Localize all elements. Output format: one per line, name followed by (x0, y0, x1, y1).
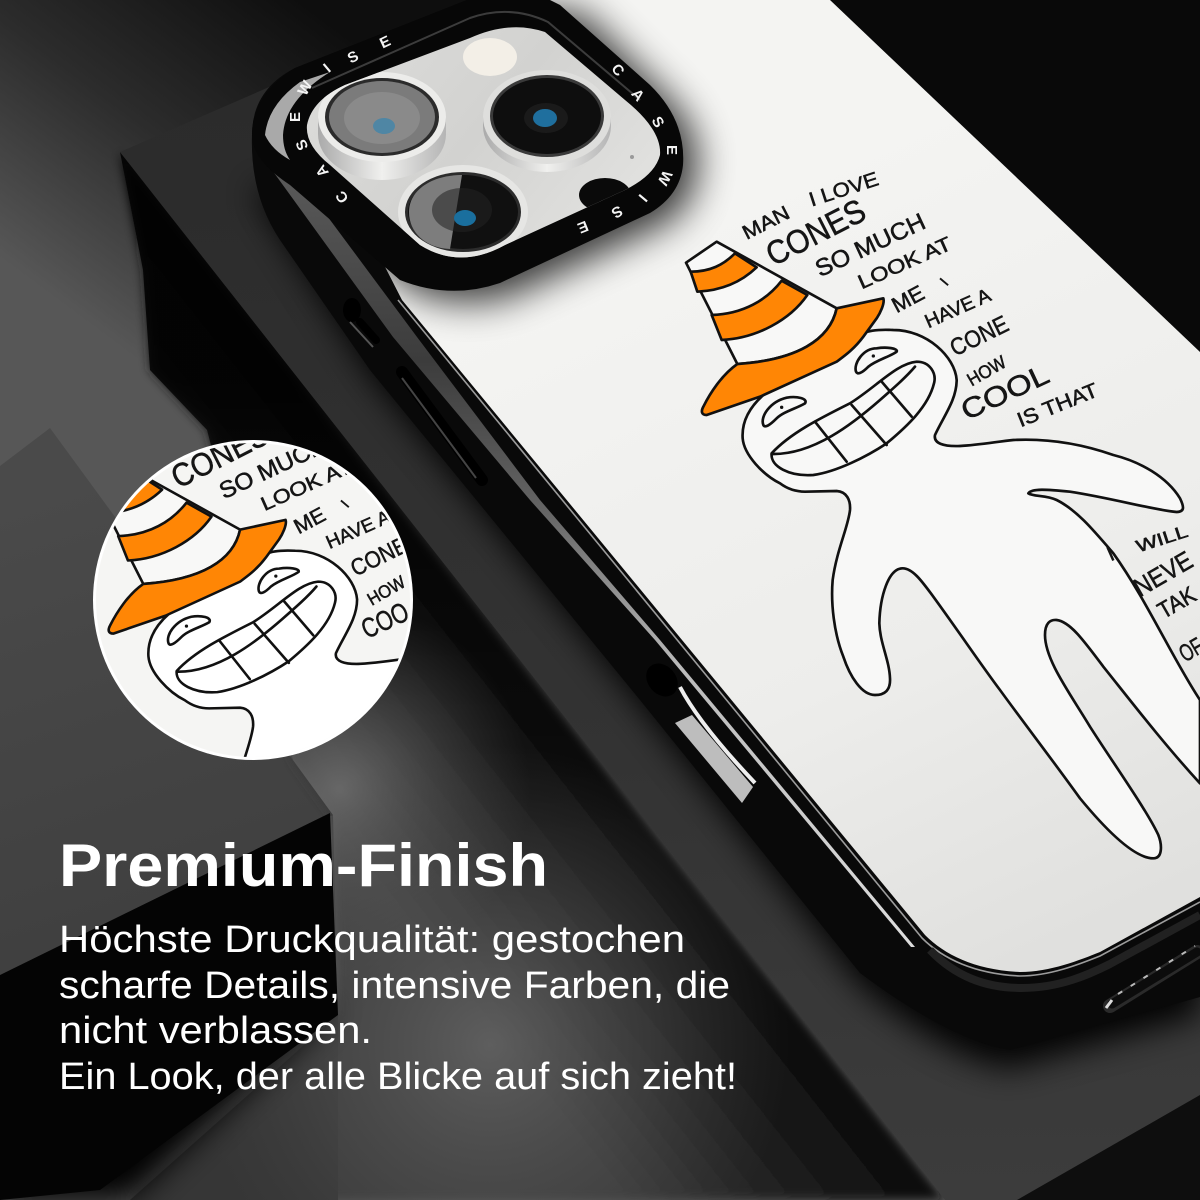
handwritten text: HOW (963, 351, 1010, 390)
artwork: cone character (686, 168, 1200, 858)
magnified eyes (168, 568, 299, 645)
ring lettering: S (648, 114, 667, 131)
ring lettering: A (628, 86, 648, 105)
ring lettering: S (293, 137, 312, 153)
mouth (772, 362, 935, 475)
ring lettering: I (635, 191, 650, 205)
glossy edge highlights (272, 170, 1200, 988)
ring lettering: E (287, 112, 304, 122)
body text (59, 919, 737, 1098)
ring lettering: E (663, 145, 680, 155)
magnified cone (107, 480, 288, 635)
magnified handwriting: COO (356, 596, 414, 645)
handwritten text: CONE (946, 311, 1013, 362)
magnified handwriting: ME (290, 503, 330, 539)
phone case (252, 0, 1200, 1050)
handwritten text: SO MUCH (811, 208, 930, 283)
lens: main (483, 70, 611, 172)
magnified handwriting: I (338, 498, 353, 511)
ring lettering: W (653, 168, 675, 189)
magnified handwriting (172, 443, 408, 637)
handwritten text: ME (887, 280, 928, 318)
ring lettering: A (312, 161, 332, 180)
handwritten text: MAN (739, 202, 793, 244)
figure outline (743, 330, 1200, 858)
handwritten text: LOOK AT (855, 233, 955, 294)
ring reflection (312, 12, 640, 100)
ring lettering: C (608, 61, 628, 80)
ring lettering: S (345, 48, 362, 67)
handwritten text: I LOVE (806, 168, 881, 211)
ring lettering: C (332, 187, 352, 206)
ring lettering: I (320, 61, 334, 76)
ring lettering: W (295, 77, 317, 99)
lens: ultra wide (318, 72, 446, 180)
magnified handwriting: HOW (364, 572, 409, 609)
flash (463, 38, 517, 76)
handwritten text: WILL (1133, 521, 1191, 556)
clear rim highlight (265, 72, 330, 160)
side volume button (402, 372, 482, 480)
eyes (763, 348, 897, 426)
island shadow on back (386, 0, 726, 331)
camera island (252, 0, 683, 291)
white back panel (300, 0, 1200, 972)
handwritten text: HAVE A (922, 285, 994, 333)
microphone hole (579, 178, 629, 208)
magnified handwriting: HAVE A (323, 506, 394, 553)
handwritten text (739, 168, 1200, 668)
body text: nicht verblassen. (59, 1010, 372, 1052)
ring lettering: E (575, 217, 591, 236)
lens: telephoto (398, 165, 528, 259)
title: Premium-Finish (59, 832, 548, 899)
phone shadow (253, 180, 1200, 1068)
magnified mouth (177, 582, 336, 692)
detail magnifier circle (93, 440, 413, 760)
magnified figure (147, 549, 399, 757)
handwritten text: COOL (956, 359, 1054, 427)
side button hole (343, 298, 376, 347)
magnified handwriting: LOOK AT (258, 456, 356, 516)
handwritten text: CONES (760, 192, 872, 274)
magnified handwriting: CONE (346, 532, 412, 581)
magnified handwriting: SO MUCH (215, 432, 331, 504)
body text: Höchste Druckqualität: gestochen (59, 919, 685, 961)
body text: scharfe Details, intensive Farben, die (59, 965, 730, 1007)
handwritten text: IS THAT (1014, 379, 1102, 432)
magnified handwriting: CONES (165, 416, 274, 495)
chrome side button (640, 657, 755, 803)
charging port (1106, 946, 1197, 1008)
ring lettering: E (377, 33, 393, 52)
body text: Ein Look, der alle Blicke auf sich zieht! (59, 1056, 737, 1098)
handwritten text: I (937, 276, 952, 289)
ring lettering (287, 33, 680, 236)
traffic cone hat (686, 242, 884, 415)
handwritten text: I (1103, 543, 1118, 566)
camera window (307, 27, 660, 258)
ring lettering: S (608, 202, 625, 221)
